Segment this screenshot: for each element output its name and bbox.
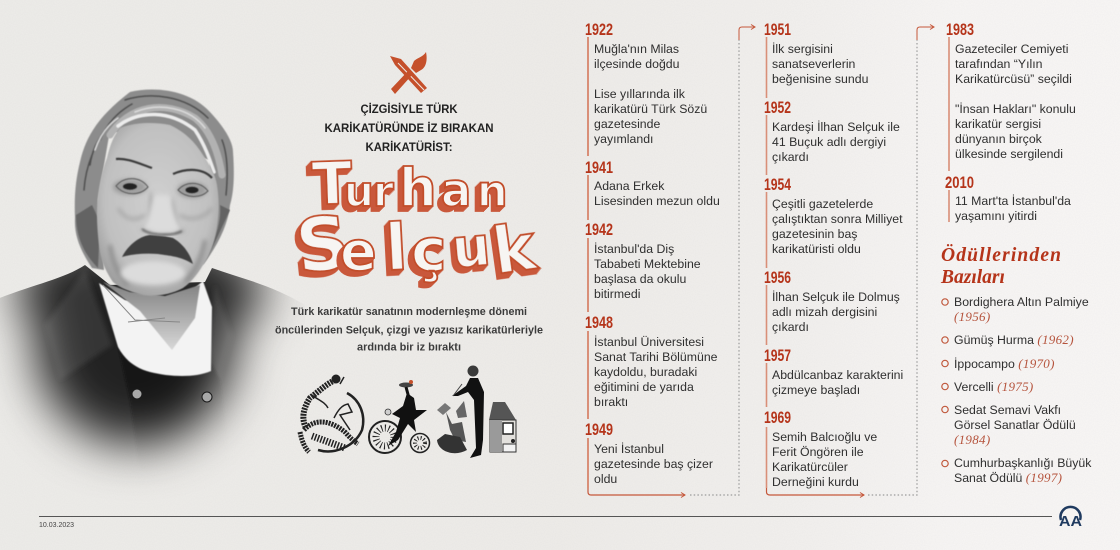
1954: çalıştıktan sonra Milliyet <box>772 212 903 226</box>
1951: 1951 <box>764 20 791 39</box>
1954: 1954 <box>764 175 791 194</box>
1983: Karikatürcüsü” seçildi <box>955 72 1072 86</box>
awards list <box>942 295 1092 485</box>
1922: Lise yıllarında ilk <box>594 87 686 101</box>
1941 <box>585 158 720 208</box>
logo: AA <box>1059 507 1083 530</box>
1949: gazetesinde baş çizer <box>594 457 713 471</box>
1957: 1957 <box>764 346 791 365</box>
side hair <box>76 205 230 268</box>
moustache <box>122 235 193 264</box>
subtitle: Türk karikatür sanatının modernleşme dönemi <box>291 306 527 318</box>
eye lids <box>116 179 208 197</box>
title: Turhan Selçuk: e <box>340 220 377 283</box>
1948: kaydoldu, buradaki <box>594 365 697 379</box>
title: Turhan Selçuk: T <box>311 148 353 219</box>
date: 10.03.2023 <box>39 522 74 529</box>
1951: İlk sergisini <box>772 42 833 56</box>
1942: Tababeti Mektebine <box>594 257 701 271</box>
awards list: Sanat Ödülü (1997) <box>954 470 1062 485</box>
1941: Adana Erkek <box>594 179 665 193</box>
logo: AA: AA <box>1059 514 1083 530</box>
1948 <box>585 313 718 409</box>
1956 <box>764 268 900 334</box>
icon: crossed pencil and brush <box>390 52 427 94</box>
facial shadows <box>110 179 212 285</box>
heading <box>324 103 494 154</box>
barber and seated figure <box>437 366 484 458</box>
1956: adlı mizah dergisini <box>772 305 877 319</box>
2010: 11 Mart'ta İstanbul'da <box>955 194 1071 208</box>
bullets <box>942 299 948 467</box>
1954 <box>764 175 903 256</box>
portrait photo <box>0 89 298 483</box>
heading: ÇİZGİSİYLE TÜRK <box>360 103 458 116</box>
1948: bıraktı <box>594 395 628 409</box>
1969: Karikatürcüler <box>772 460 848 474</box>
awards list: Gümüş Hurma (1962) <box>954 332 1074 347</box>
title: Turhan Selçuk: u <box>449 214 493 280</box>
1957 <box>764 346 903 397</box>
dragon and rider <box>300 375 363 452</box>
1949 <box>585 420 713 486</box>
1941: 1941 <box>585 158 613 177</box>
awards list: İppocampo (1970) <box>954 356 1055 371</box>
2010: yaşamını yitirdi <box>955 209 1037 223</box>
cyclist <box>369 380 430 453</box>
1956: İlhan Selçuk ile Dolmuş <box>772 290 900 304</box>
title: Turhan Selçuk: h <box>399 158 437 219</box>
1983: Gazeteciler Cemiyeti <box>955 42 1068 56</box>
1922: gazetesinde <box>594 117 660 131</box>
1948: 1948 <box>585 313 613 332</box>
1952: 1952 <box>764 98 791 117</box>
1956: çıkardı <box>772 320 809 334</box>
1948: eğitimini de yarıda <box>594 380 694 394</box>
awards heading: Ödüllerinden <box>941 245 1061 266</box>
1922: yayımlandı <box>594 132 653 146</box>
1969: Semih Balcıoğlu ve <box>772 430 877 444</box>
1922: ilçesinde doğdu <box>594 57 680 71</box>
awards list: Sedat Semavi Vakfı <box>954 403 1061 417</box>
1948: İstanbul Üniversitesi <box>594 335 704 349</box>
timeline bars and connector <box>766 37 768 488</box>
subtitle: öncülerinden Selçuk, çizgi ve yazısız karikatürleriyle <box>275 324 543 336</box>
subtitle <box>275 306 543 354</box>
1954: Çeşitli gazetelerde <box>772 197 873 211</box>
1983: ülkesinde sergilendi <box>955 147 1063 161</box>
title: Turhan Selçuk: a <box>441 164 471 217</box>
1969: Ferit Öngören ile <box>772 445 864 459</box>
title: Turhan Selçuk: S <box>292 200 354 291</box>
awards list: (1984) <box>954 432 990 447</box>
1969 <box>764 408 877 489</box>
2010 <box>945 173 1071 223</box>
1941: Lisesinden mezun oldu <box>594 194 720 208</box>
nostrils shadow <box>142 229 182 235</box>
awards list: Cumhurbaşkanlığı Büyük <box>954 456 1092 470</box>
1969: 1969 <box>764 408 791 427</box>
title: Turhan Selçuk <box>292 148 542 291</box>
eyes <box>123 183 198 193</box>
footer line <box>39 516 1052 517</box>
1922: 1922 <box>585 20 613 39</box>
awards heading <box>940 245 1061 288</box>
1983: dünyanın birçok <box>955 132 1043 146</box>
1942: İstanbul'da Diş <box>594 242 674 256</box>
1949: Yeni İstanbul <box>594 442 664 456</box>
awards list: (1956) <box>954 309 990 324</box>
nose <box>142 195 182 233</box>
collar shadow <box>103 285 180 322</box>
1951: beğenisine sundu <box>772 72 869 86</box>
1942: bitirmedi <box>594 287 640 301</box>
heading: KARİKATÜRİST: <box>366 141 452 154</box>
title: Turhan Selçuk: ç <box>411 216 447 286</box>
title: Turhan Selçuk: k <box>488 211 542 290</box>
1942: 1942 <box>585 220 613 239</box>
1951: sanatseverlerin <box>772 57 856 71</box>
timeline column 3 <box>945 20 1076 223</box>
timeline column 1 <box>585 20 755 495</box>
1952: çıkardı <box>772 150 809 164</box>
neck <box>103 282 200 350</box>
awards list: Görsel Sanatlar Ödülü <box>954 418 1076 432</box>
timeline column 2 <box>764 20 934 495</box>
hair highlights <box>84 96 227 195</box>
title: Turhan Selçuk: n <box>477 167 508 217</box>
1957: Abdülcanbaz karakterini <box>772 368 903 382</box>
1922: karikatürü Türk Sözü <box>594 102 707 116</box>
1952 <box>764 98 900 164</box>
1957: çizmeye başladı <box>772 383 860 397</box>
1922 <box>585 20 707 146</box>
1942 <box>585 220 701 301</box>
waistcoat buttons <box>132 389 212 402</box>
1942: başlasa da okulu <box>594 272 686 286</box>
1952: 41 Buçuk adlı dergiyi <box>772 135 886 149</box>
illustrations: cartoon figures <box>300 366 516 458</box>
1983 <box>946 20 1076 161</box>
awards list: Vercelli (1975) <box>954 379 1034 394</box>
shirt <box>99 281 212 376</box>
1969: Derneğini kurdu <box>772 475 859 489</box>
timeline bars and connector <box>587 37 589 488</box>
1948: Sanat Tarihi Bölümüne <box>594 350 718 364</box>
title: Turhan Selçuk: r <box>373 167 394 216</box>
heading: KARİKATÜRÜNDE İZ BIRAKAN <box>324 122 494 135</box>
1949: 1949 <box>585 420 613 439</box>
1952: Kardeşi İlhan Selçuk ile <box>772 120 900 134</box>
subtitle: ardında bir iz bıraktı <box>357 342 461 354</box>
lips and chin <box>121 261 185 285</box>
1922: Muğla'nın Milas <box>594 42 679 56</box>
jacket <box>0 265 298 483</box>
awards heading: Bazıları <box>940 267 1005 288</box>
1949: oldu <box>594 472 617 486</box>
2010: 2010 <box>945 173 974 192</box>
1983: 1983 <box>946 20 974 39</box>
1954: gazetesinin baş <box>772 227 857 241</box>
title: Turhan Selçuk: l <box>384 211 409 286</box>
title: Turhan Selçuk: u <box>344 167 374 216</box>
house <box>489 402 516 452</box>
brows <box>116 159 212 178</box>
timeline bars <box>948 37 950 222</box>
face <box>97 123 219 296</box>
1983: karikatür sergisi <box>955 117 1041 131</box>
awards list: Bordighera Altın Palmiye <box>954 295 1089 309</box>
1983: tarafından “Yılın <box>955 57 1043 71</box>
1954: karikatüristi oldu <box>772 242 861 256</box>
1983: "İnsan Hakları" konulu <box>955 102 1076 116</box>
1956: 1956 <box>764 268 791 287</box>
hair <box>75 89 234 270</box>
1951 <box>764 20 869 86</box>
